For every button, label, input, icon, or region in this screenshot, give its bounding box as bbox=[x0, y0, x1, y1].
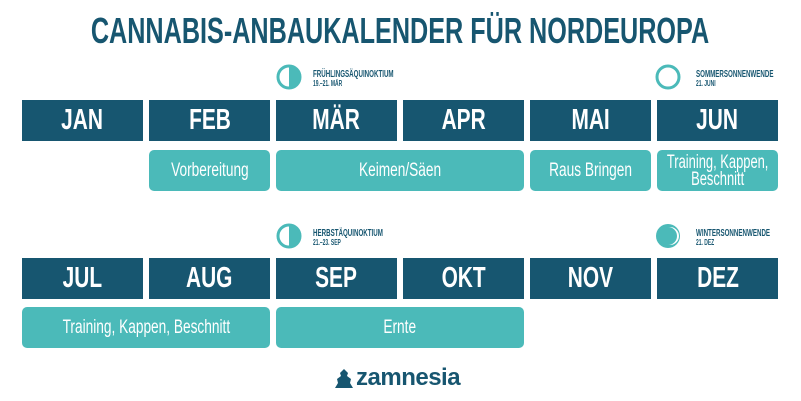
label: summer solstice: 21. JUNI bbox=[696, 79, 716, 88]
icon: spring equinox bbox=[276, 64, 302, 90]
months row 1: JUN bbox=[697, 104, 738, 136]
label: autumn equinox: HERBSTÄQUINOKTIUM bbox=[313, 228, 383, 239]
activities row 1: Training, Kappen, bbox=[667, 152, 768, 172]
label: spring equinox: 19.–21. MÄR bbox=[313, 79, 342, 88]
label: winter solstice: WINTERSONNENWENDE bbox=[696, 228, 770, 239]
activities row 1: Vorbereitung bbox=[171, 160, 248, 180]
months row 1: MÄR bbox=[313, 104, 360, 136]
months row 2: OKT bbox=[441, 262, 486, 294]
months row 1 bbox=[22, 100, 778, 141]
months row 2: JUL bbox=[63, 262, 102, 294]
months row 1: FEB bbox=[189, 104, 230, 136]
activities row 2: Training, Kappen, Beschnitt bbox=[62, 316, 230, 338]
label: summer solstice: SOMMERSONNENWENDE bbox=[696, 69, 774, 80]
months row 1: MAI bbox=[571, 104, 610, 136]
months row 2 bbox=[22, 258, 778, 299]
title: CANNABIS-ANBAUKALENDER FÜR NORDEUROPA bbox=[91, 10, 709, 51]
activities row 1 bbox=[149, 150, 778, 191]
activities row 1: Beschnitt bbox=[691, 168, 744, 190]
label: spring equinox bbox=[313, 68, 394, 88]
months row 2: DEZ bbox=[697, 262, 738, 294]
months row 2: NOV bbox=[568, 262, 613, 294]
label: spring equinox: FRÜHLINGSÄQUINOKTIUM bbox=[313, 69, 394, 80]
activities row 1: Keimen/Säen bbox=[359, 160, 441, 180]
label: winter solstice bbox=[696, 228, 770, 247]
logo: zamnesia bbox=[356, 364, 460, 391]
months row 2: SEP bbox=[316, 262, 357, 294]
activities row 2: Ernte bbox=[384, 316, 416, 338]
icon: summer solstice bbox=[656, 64, 680, 90]
activities row 2 bbox=[22, 307, 524, 348]
icon: autumn equinox bbox=[276, 224, 302, 248]
label: summer solstice bbox=[696, 69, 774, 88]
activities row 1: Raus Bringen bbox=[549, 160, 632, 180]
months row 1: JAN bbox=[62, 104, 103, 136]
months row 2: AUG bbox=[186, 262, 233, 294]
label: autumn equinox bbox=[313, 227, 383, 247]
icon: winter solstice bbox=[656, 224, 680, 248]
months row 1: APR bbox=[441, 104, 486, 136]
label: autumn equinox: 21.–23. SEP bbox=[313, 238, 341, 247]
label: winter solstice: 21. DEZ bbox=[696, 238, 714, 247]
